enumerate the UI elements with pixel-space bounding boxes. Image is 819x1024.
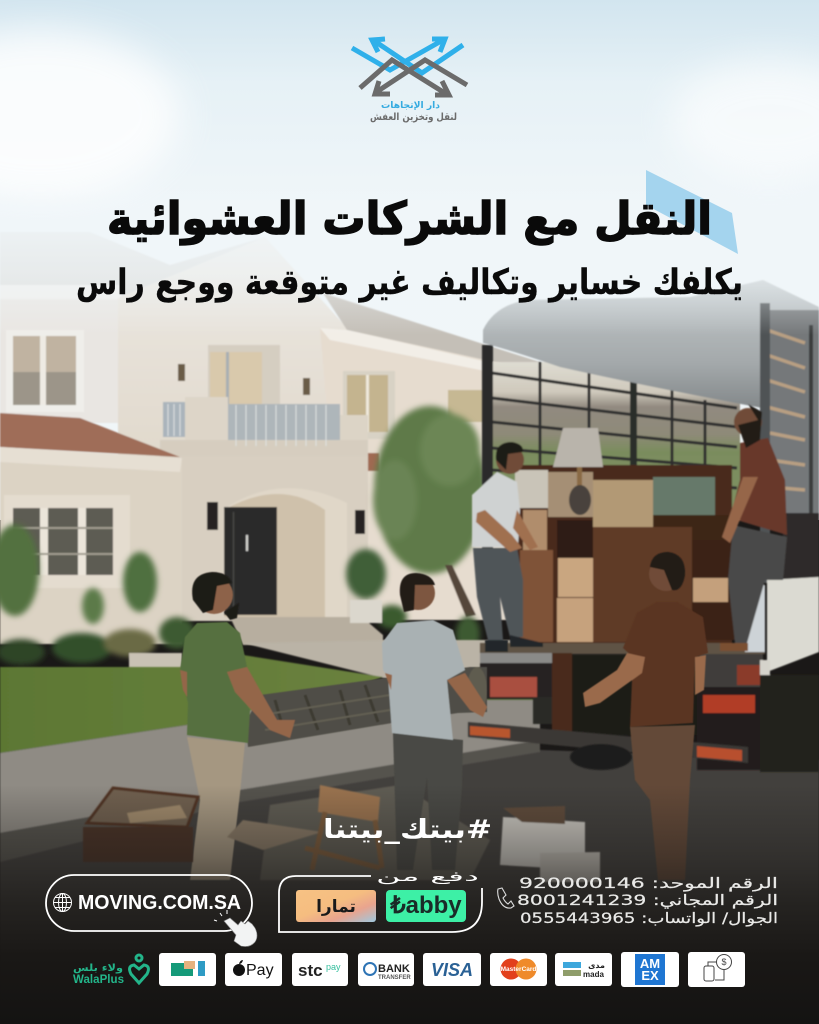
top fade over house — [0, 190, 819, 335]
bumper — [468, 722, 748, 763]
house left roof — [0, 232, 347, 330]
balcony — [160, 397, 368, 458]
lamp — [553, 428, 603, 515]
logo — [352, 39, 467, 123]
title: النقل مع الشركات العشوائية — [107, 192, 712, 245]
unified number: الرقم الموحد: 920000146 — [519, 876, 778, 892]
card: bank transfer: TRANSFER — [378, 975, 411, 981]
hashtag: #بيتك_بيتنا — [323, 815, 492, 845]
payment pill — [279, 870, 482, 932]
white drawers — [500, 806, 600, 882]
tailgate — [745, 577, 819, 772]
kerb — [0, 740, 540, 862]
card: apple pay: Pay — [246, 962, 274, 979]
tabby badge: ₺abby — [389, 892, 462, 919]
roof fascia — [0, 447, 182, 472]
card: american express — [621, 952, 679, 987]
left lower wing — [0, 462, 182, 644]
icon: globe — [54, 894, 72, 912]
card: bank transfer — [358, 953, 414, 986]
card: mada — [555, 953, 612, 986]
entrance arch — [223, 488, 347, 617]
house right wing — [320, 328, 540, 620]
wheel — [570, 744, 632, 770]
house right roof — [323, 293, 540, 372]
house left wing upper wall — [0, 298, 125, 423]
walaplus logo: WalaPlus — [73, 974, 124, 986]
card: stc pay: pay — [326, 962, 341, 972]
icon: phone — [498, 888, 514, 908]
worker on truck right — [720, 404, 787, 651]
card: mada: مدى — [588, 961, 605, 970]
card: stc pay: stc — [298, 961, 323, 980]
mobile number: الجوال/ الواتساب: 0555443965 — [520, 911, 778, 927]
sky background — [0, 0, 819, 520]
shrubs and plants — [0, 524, 480, 665]
card: bank transfer: BANK — [378, 963, 410, 975]
icon: pointing hand — [214, 910, 257, 946]
balcony door window — [208, 345, 280, 436]
logo tagline: لنقل وتخزين العفش — [370, 112, 457, 123]
toll free number: الرقم المجاني: 8001241239 — [517, 893, 778, 909]
card: visa — [423, 953, 481, 986]
worker on truck left — [472, 442, 543, 652]
tile roof — [0, 413, 180, 457]
photo: workers and carpet — [180, 552, 708, 880]
small grass strip — [470, 690, 540, 705]
website pill — [46, 875, 252, 931]
driveway — [243, 640, 540, 705]
broken table top — [227, 820, 322, 850]
icon: heart — [130, 955, 148, 983]
lawn — [0, 655, 383, 753]
worker middle — [382, 573, 487, 870]
bottom dark fade — [0, 785, 819, 1024]
photo: ground — [0, 640, 819, 1024]
tamara badge: تمارا — [316, 897, 356, 917]
photo: house — [0, 232, 540, 675]
photo: foreground furniture — [83, 785, 600, 882]
card: cash on delivery — [688, 952, 745, 987]
card: apple pay — [225, 953, 282, 986]
walaplus logo: ولاء بلس — [73, 963, 123, 974]
house left window upper — [6, 330, 84, 412]
worker left — [180, 572, 295, 880]
furniture load — [515, 428, 740, 643]
card: american express: AM — [640, 956, 660, 971]
gravel patch — [260, 785, 490, 880]
logo name: دار الإتجاهات — [381, 101, 440, 111]
truck bed and rear — [468, 577, 819, 772]
payment label: دفع من — [376, 870, 480, 885]
photo: truck — [468, 280, 819, 772]
entrance block — [178, 456, 368, 621]
card: visa: VISA — [431, 960, 473, 980]
right wing windows — [343, 371, 488, 439]
pavement — [0, 680, 540, 833]
tree — [373, 406, 486, 574]
card: cash on delivery: $ — [721, 957, 727, 967]
card: bank cards — [159, 953, 216, 986]
logo grey arrows — [360, 60, 467, 95]
card: stc pay — [292, 953, 348, 986]
blue accent shape — [646, 170, 738, 254]
card: american express: EX — [641, 968, 659, 983]
walaplus logo — [73, 955, 148, 986]
left lower window — [4, 495, 130, 588]
wall lamps lower — [207, 502, 365, 534]
wall lamps upper — [178, 364, 310, 395]
payment cards row — [159, 952, 745, 987]
website address: MOVING.COM.SA — [78, 891, 241, 914]
card: mastercard: MasterCard — [501, 966, 536, 973]
worker right — [583, 552, 708, 880]
broken chair — [305, 785, 382, 870]
truck back cage — [482, 345, 740, 595]
card: mada: mada — [583, 970, 604, 979]
house central wall — [118, 237, 347, 620]
tamara badge — [296, 890, 376, 922]
road — [0, 750, 819, 1024]
carpet — [246, 667, 487, 747]
broken desk — [83, 788, 198, 862]
logo blue arrows — [352, 39, 463, 73]
card: mastercard — [490, 953, 547, 986]
small roof piece — [368, 453, 379, 471]
steps — [230, 617, 383, 645]
planters — [129, 600, 382, 675]
truck side cage — [760, 303, 819, 583]
contact numbers — [517, 876, 778, 927]
truck canopy — [483, 280, 819, 420]
